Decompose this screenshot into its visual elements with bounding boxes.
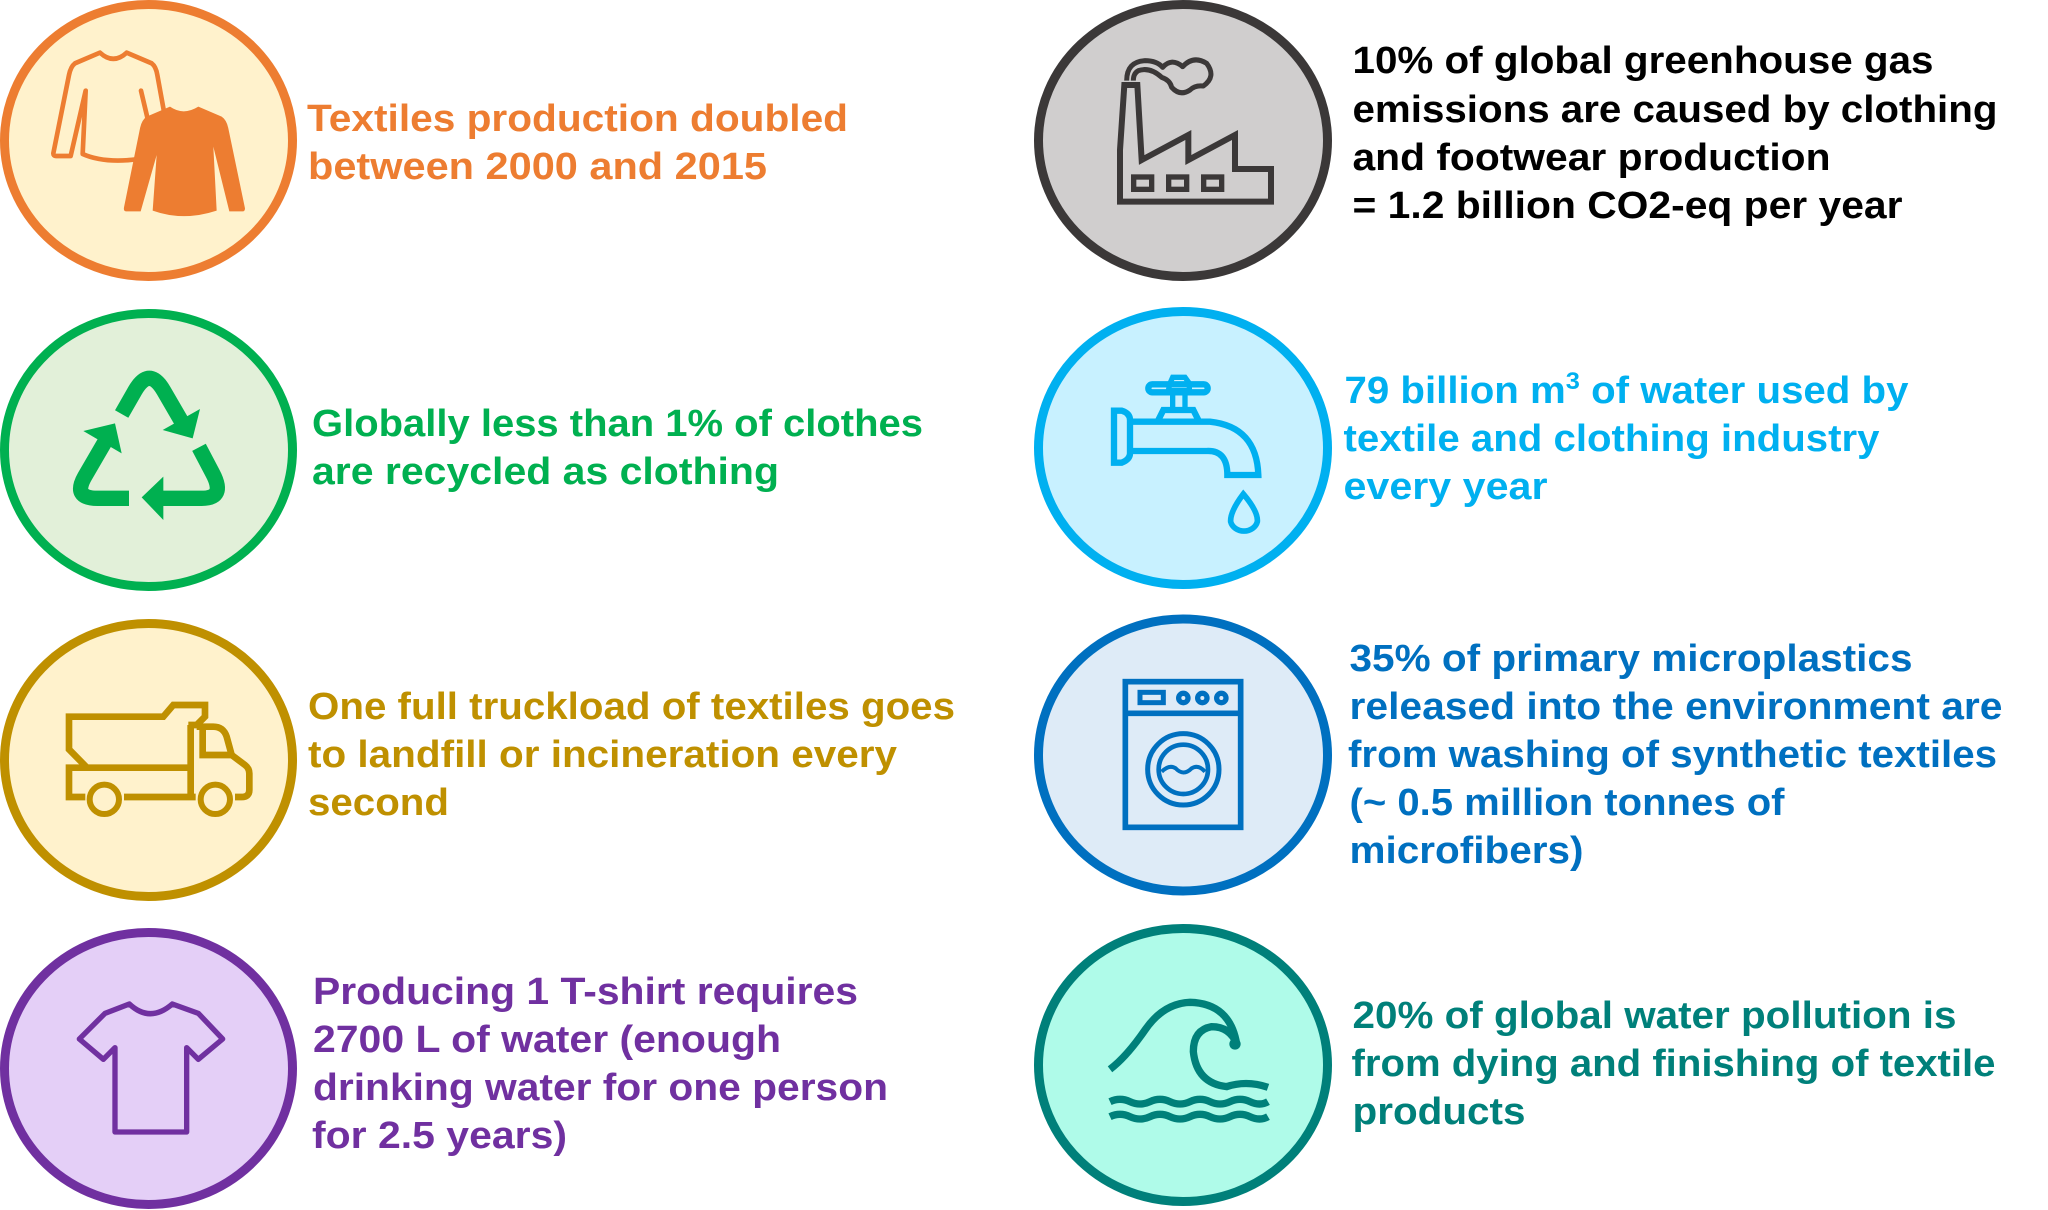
text: microplastics share: released into the environment are (1350, 686, 2002, 728)
circle badge: gold (4, 624, 292, 896)
text: truckload of textiles: to landfill or incineration every (308, 734, 897, 776)
text: water volume: 79 billion m (1344, 370, 1554, 412)
panel: water use (1038, 312, 1908, 584)
text: recycled clothes (312, 403, 923, 493)
panel: greenhouse gas (1038, 4, 1998, 276)
text: emissions: and footwear production (1352, 137, 1830, 179)
panel: water pollution (1038, 928, 1996, 1202)
circle badge: orange (4, 4, 292, 276)
text: water volume: 3 (1566, 368, 1580, 395)
circle badge: green (4, 314, 292, 586)
circle badge: teal (1038, 928, 1328, 1202)
text: emissions: emissions are caused by clothing (1352, 89, 1998, 131)
text: emissions (1352, 40, 1998, 227)
text: water volume: textile and clothing industry (1344, 418, 1880, 460)
icon: T-shirt (79, 1004, 223, 1132)
text: water pollution share (1352, 995, 1996, 1133)
panel: textiles production (4, 4, 848, 276)
text: emissions: 10% of global greenhouse gas (1352, 40, 1934, 82)
circle badge: light blue (1038, 312, 1328, 584)
text: T-shirt water use: for 2.5 years) (312, 1115, 567, 1157)
text: truckload of textiles (308, 686, 955, 824)
text: microplastics share: 35% of primary microplastics (1350, 638, 1912, 680)
text: emissions: = 1.2 billion CO2-eq per year (1352, 185, 1903, 227)
panel: T-shirt water (4, 932, 888, 1204)
text: water pollution share: 20% of global water pollution is (1352, 995, 1956, 1037)
text: water pollution share: from dying and finishing of textile (1352, 1043, 1996, 1085)
text: T-shirt water use: 2700 L of water (enough (313, 1019, 781, 1061)
circle badge: blue (1038, 619, 1328, 891)
circle badge: grey (1038, 4, 1328, 276)
icon: factory (1120, 60, 1271, 202)
text: water volume: of water used by (1580, 370, 1908, 412)
text: water volume (1344, 368, 1908, 508)
icon: two sweaters (53, 53, 245, 216)
text: truckload of textiles: second (308, 782, 449, 824)
icon: washing machine (1125, 682, 1241, 827)
panel: recycling (4, 314, 923, 586)
panel: microplastics (1038, 619, 2002, 891)
text: truckload of textiles: One full truckload of textiles goes (308, 686, 955, 728)
text: recycled clothes: are recycled as clothing (312, 451, 779, 493)
text: production doubled: Textiles production doubled (307, 98, 848, 140)
icon: dripping tap (1114, 377, 1258, 531)
text: water pollution share: products (1352, 1091, 1526, 1133)
text: microplastics share: from washing of synthetic textiles (1348, 734, 1997, 776)
text: T-shirt water use: drinking water for one person (313, 1067, 888, 1109)
circle badge: purple (4, 932, 292, 1204)
text: microplastics share (1348, 638, 2002, 872)
panel: landfill truck (4, 624, 955, 896)
text: microplastics share: microfibers) (1350, 830, 1584, 872)
text: production doubled: between 2000 and 2015 (308, 146, 767, 188)
text: T-shirt water use (312, 971, 888, 1157)
text: recycled clothes: Globally less than 1% of clothes (312, 403, 923, 445)
text: production doubled (307, 98, 848, 188)
text: water volume: every year (1344, 466, 1548, 508)
text: T-shirt water use: Producing 1 T-shirt requires (313, 971, 858, 1013)
text: microplastics share: (~ 0.5 million tonnes of (1350, 782, 1785, 824)
icon: recycle arrows (81, 378, 217, 520)
icon: ocean wave (1110, 1002, 1268, 1119)
icon: dump truck (69, 705, 249, 814)
